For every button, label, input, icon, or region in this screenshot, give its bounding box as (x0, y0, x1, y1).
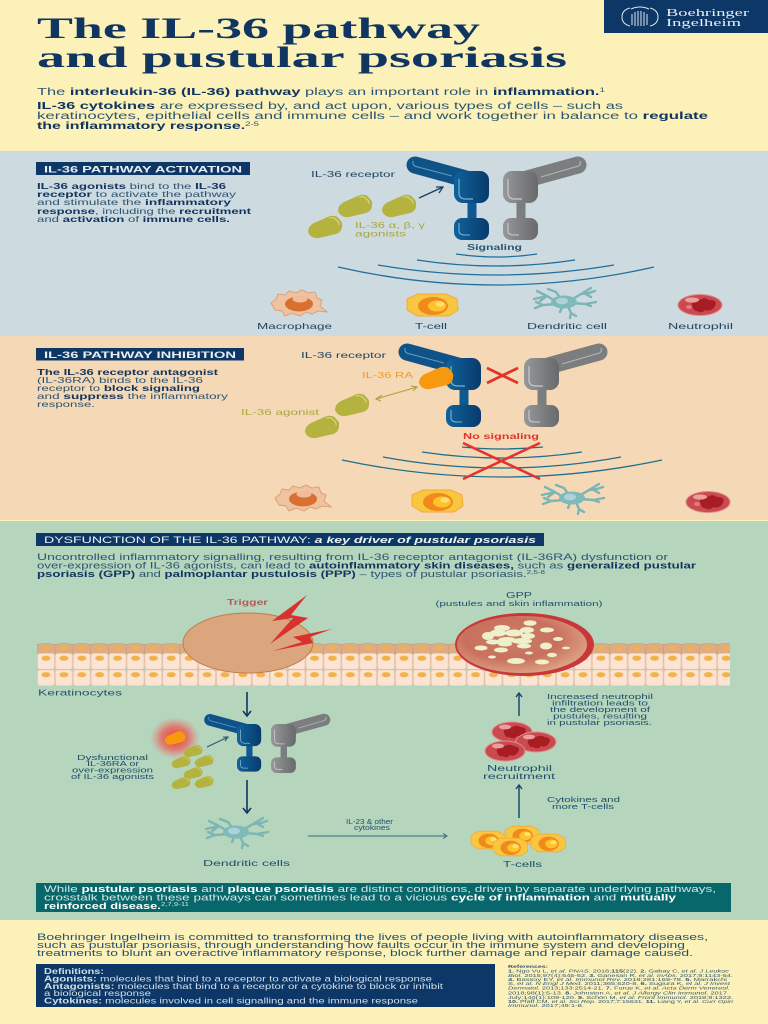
blocked IL-36 receptor diagram (405, 348, 601, 427)
references (508, 964, 734, 1008)
references: 1. Ngo Vu L, et al. PNAS. 2018; 115 (22). 2. Gabay C, et al. J Leukoc (508, 968, 730, 974)
T-cell cluster (471, 826, 566, 856)
IL-36 receptor diagram (413, 161, 580, 240)
label: signaling: Signaling (467, 242, 522, 252)
cell: T-cell (407, 294, 458, 331)
title (37, 12, 567, 74)
label: agonists: agonists (355, 228, 406, 238)
heading: dysfunction (36, 533, 544, 546)
activation description: IL-36 agonists bind to the IL-36 (37, 181, 226, 191)
agonist molecules (305, 394, 369, 438)
trigger lesion (183, 613, 313, 673)
label: GPP: (pustules and skin inflammation) (436, 599, 603, 608)
label: keratinocytes: Keratinocytes (38, 688, 122, 698)
label: GPP (436, 590, 603, 608)
callout: cycle of inflammation: crosstalk between these pathways can sometimes lead to a vicious cycle of inflammation and mutually (44, 892, 676, 902)
panel: IL-36 pathway inhibition (0, 336, 768, 520)
panel: dysfunction of the IL-36 pathway (0, 521, 768, 920)
dysfunction description: psoriasis (GPP) and palmoplantar pustulosis (PPP) – types of pustular psoriasis. (37, 569, 472, 579)
callout: cycle of inflammation (36, 883, 731, 912)
dysfunction description: 2,5-8 (527, 570, 545, 576)
references: July;140(1):109-120. 9. Schön M, et al. Front Immunol. 2018;9:1323. (508, 995, 733, 1000)
cell: macrophage (275, 485, 331, 511)
definitions box (36, 964, 495, 1007)
inhibition description: receptor to block signaling (37, 383, 200, 393)
label: dysfunctional IL-36RA: of IL-36 agonists (71, 772, 154, 781)
dysfunctional IL-36RA glow (150, 717, 200, 759)
intro text: 1 (600, 88, 606, 94)
receptor diagram (209, 717, 326, 773)
icon: lightning bolts (270, 595, 332, 651)
label: dysfunctional IL-36RA: over-expression (72, 766, 153, 774)
commitment statement (37, 932, 708, 958)
inhibition description: and suppress the inflammatory (37, 391, 229, 401)
cell: dendritic cell: Dendritic cell (527, 321, 607, 331)
commitment statement: such as pustular psoriasis, through understanding how faults occur in the immune system and developing (37, 940, 685, 950)
arrow: agonists to receptor (207, 737, 228, 747)
neutrophil cluster (485, 722, 556, 761)
heading: dysfunction: DYSFUNCTION OF THE IL-36 PATHWAY: a key driver of pustular psoriasis (44, 535, 536, 546)
cell: macrophage: Macrophage (257, 321, 332, 331)
neutrophil infiltration note: Increased neutrophil (547, 692, 654, 701)
neutrophil infiltration note: pustules, resulting (553, 712, 647, 720)
dysfunction description (37, 552, 697, 579)
label: neutrophil recruitment: Neutrophil (487, 763, 552, 773)
heading: activation (36, 162, 250, 176)
red cross: receptor dimer blocked (487, 368, 518, 383)
intro text (37, 87, 709, 132)
label: dysfunctional IL-36RA: IL-36RA or (87, 759, 140, 768)
label: cytokines and more T-cells: Cytokines and (547, 795, 620, 804)
heading: inhibition: IL-36 PATHWAY INHIBITION (44, 350, 236, 361)
intro text: the inflammatory response. (37, 121, 246, 132)
neutrophil infiltration note (547, 692, 654, 727)
inhibition description: response. (37, 399, 95, 409)
label: cytokines and more T-cells: more T-cells (552, 802, 614, 811)
references: Immunol. 2017;49:1-8. (508, 1003, 584, 1008)
over-expressed agonists (172, 745, 213, 789)
label: IL-23 and other cytokines: IL-23 & other (346, 819, 394, 826)
intro text: keratinocytes, epithelial cells and immune cells – and work together in balance to regulate (37, 111, 709, 122)
keratinocyte skin layer (37, 643, 730, 686)
label: neutrophil recruitment (483, 763, 556, 781)
panel: IL-36 pathway activation (0, 151, 768, 336)
references: Biol. 2015;97(4):645-52. 3. Ganesan R, et al. mAbs. 2017;9:1143-54. (508, 973, 733, 978)
intro text: IL-36 cytokines are expressed by, and act upon, various types of cells – such as (37, 101, 623, 112)
activation description: and activation of immune cells. (37, 214, 230, 224)
cell: neutrophil: Neutrophil (668, 321, 733, 331)
cell: dendritic cell (527, 288, 607, 331)
cell: T-cell: T-cell (415, 321, 447, 331)
activation description: response , including the recruitment (37, 206, 251, 216)
label: dysfunctional IL-36RA: Dysfunctional (77, 753, 149, 762)
label: IL-36 receptor: IL-36 receptor (311, 169, 395, 179)
references: References: (508, 964, 549, 969)
title: and pustular psoriasis (37, 41, 567, 74)
cell: dendritic cell (542, 484, 604, 514)
callout: cycle of inflammation: 2,7,9-11 (161, 902, 189, 908)
definitions box: Definitions: (44, 967, 104, 976)
dysfunction description: Uncontrolled inflammatory signalling, resulting from IL-36 receptor antagonist (IL-36RA) dysfunction or (37, 552, 668, 562)
references: S, et al. N Engl J Med. 2011;365:620-8. 6. Sugiura K, et al. J Invest (508, 981, 731, 986)
label: no signaling: No signaling (463, 431, 539, 441)
logo: Boehringer Ingelheim: Boehringer (666, 8, 750, 19)
label: trigger: Trigger (227, 597, 269, 607)
label: dysfunctional IL-36RA (71, 753, 154, 781)
references: 10. Pfaff CM, et al. Sci Rep. 2017;7:15631. 11. Liang Y, et al. Curr Opin (508, 999, 734, 1004)
label: IL-36 RA: IL-36 RA (362, 370, 413, 380)
label: dendritic cells: Dendritic cells (203, 858, 290, 868)
label: IL-36 receptor: IL-36 receptor (301, 350, 386, 360)
label: IL-23 and other cytokines (346, 819, 394, 832)
cell: neutrophil (686, 492, 730, 512)
label: T-cells: T-cells (503, 859, 542, 869)
inhibition description: (IL-36RA) binds to the IL-36 (37, 375, 203, 385)
label: IL-23 and other cytokines: cytokines (354, 825, 391, 832)
references: 2018;98(1):5-13. 8. Johnston A, et al. J Allergy Clin Immunol. 2017 (508, 990, 728, 996)
definitions box: a biological response (44, 989, 152, 998)
label: neutrophil recruitment: recruitment (483, 771, 556, 781)
double arrow: agonist and antagonist competition (376, 386, 417, 401)
activation description (37, 181, 251, 224)
cell: macrophage (257, 290, 332, 331)
neutrophil infiltration note: infiltration leads to (552, 698, 648, 708)
cell: neutrophil (668, 294, 733, 331)
activation description: receptor to activate the pathway (37, 189, 237, 199)
inhibition description (37, 367, 229, 409)
label: agonists: IL-36 α, β, γ (355, 220, 426, 230)
intro text: 2-5 (245, 122, 260, 128)
arrow: dendritic cells to T-cells (308, 834, 447, 838)
definitions box: Antagonists: molecules that bind to a receptor or a cytokine to block or inhibit (44, 982, 444, 991)
intro text: The interleukin-36 (IL-36) pathway plays an important role in inflammation. (37, 87, 558, 98)
callout: cycle of inflammation: While pustular psoriasis and plaque psoriasis are distinct conditions, driven by separate underlying pathways, (44, 884, 716, 894)
cell: T-cell (412, 490, 463, 512)
arrow: receptor to dendritic cells (243, 780, 251, 813)
label: IL-36 agonist: IL-36 agonist (241, 407, 320, 417)
activation description: and stimulate the inflammatory (37, 197, 231, 207)
footer (36, 932, 734, 1008)
header (37, 0, 768, 132)
IL-36RA antagonist molecule (419, 367, 453, 389)
neutrophil infiltration note: in pustular psoriasis. (547, 718, 652, 727)
heading: inhibition (36, 348, 244, 361)
inhibition description: The IL-36 receptor antagonist (37, 367, 218, 377)
arrow: neutrophils to GPP (516, 693, 522, 716)
label: agonists (355, 220, 426, 238)
label: cytokines and more T-cells (547, 795, 620, 811)
references: Dermatol. 2013;133:2514-21. 7. Furue K, et al. Acta Derm Venereol. (508, 986, 730, 990)
references: 4. Bassoy EY, et al. Immunol Rev. 2018;281:169-78. 5. Marrakchi (508, 977, 727, 982)
definitions box: Agonists: molecules that bind to a receptor to activate a biological response (44, 974, 433, 984)
logo: Boehringer Ingelheim (604, 0, 768, 33)
title: The IL-36 pathway (37, 12, 480, 45)
arrow: lesion to receptor (243, 692, 251, 716)
red cross: no signaling (463, 443, 540, 479)
label: GPP: GPP (506, 590, 532, 600)
callout: cycle of inflammation: reinforced disease. (44, 901, 161, 911)
agonist molecules (308, 195, 416, 238)
commitment statement: treatments to blunt an overactive inflammatory response, block further damage and repair damage caused. (37, 948, 693, 958)
signaling arcs (338, 254, 654, 285)
GPP skin lesion (455, 613, 594, 676)
arrow: agonist to receptor (419, 187, 443, 198)
dendritic cell (206, 818, 268, 848)
logo: Boehringer Ingelheim: Ingelheim (666, 18, 741, 29)
arrow: T-cells to neutrophils (516, 785, 522, 818)
heading: activation: IL-36 PATHWAY ACTIVATION (44, 164, 242, 176)
definitions box: Cytokines: molecules involved in cell signalling and the immune response (44, 996, 419, 1006)
commitment statement: Boehringer Ingelheim is committed to transforming the lives of people living with autoinflammatory diseases, (37, 932, 708, 942)
signaling arcs (342, 447, 662, 477)
neutrophil infiltration note: the development of (550, 705, 651, 714)
dysfunction description: over-expression of IL-36 agonists, can lead to autoinflammatory skin diseases, such as generalized pustular (37, 560, 697, 570)
